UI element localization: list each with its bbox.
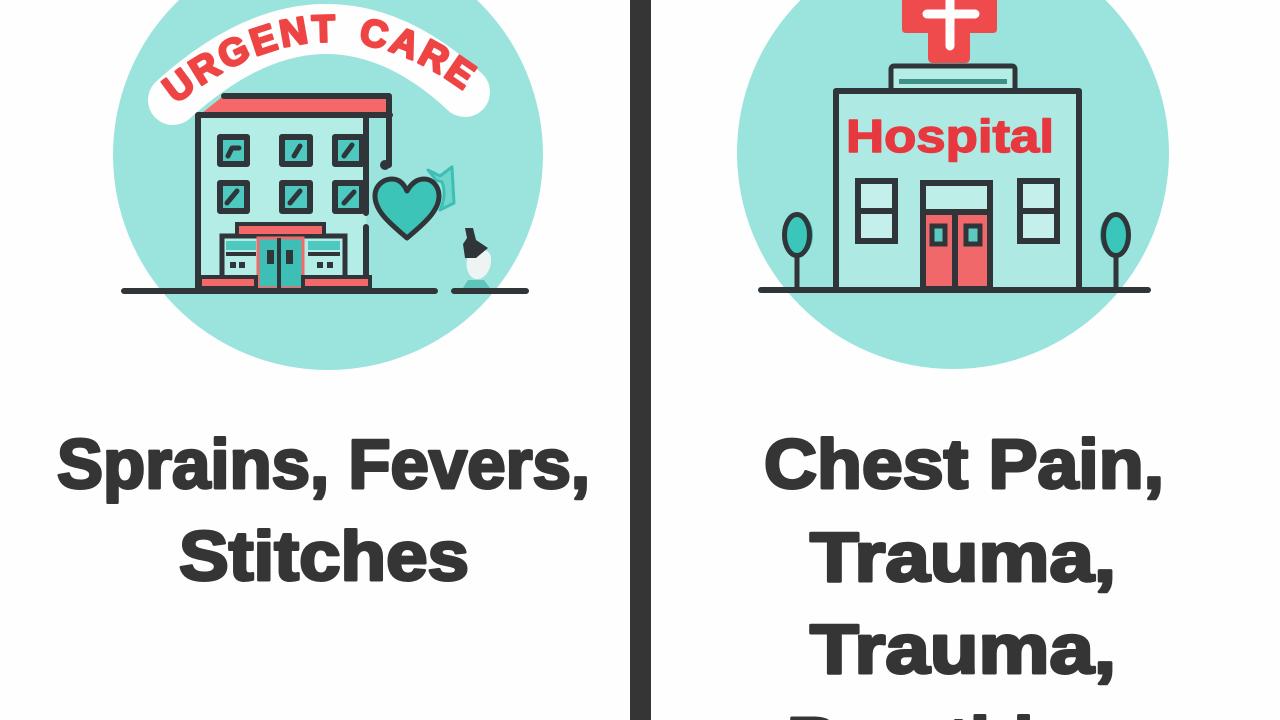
roof awning (198, 96, 390, 289)
icon: urgent care building (198, 96, 390, 289)
divider (630, 0, 651, 720)
entrance (222, 224, 345, 288)
text: hospital conditions: Trauma, (810, 518, 1116, 596)
rooftop (891, 66, 1015, 91)
icon: heart (375, 179, 439, 238)
right tree (1100, 214, 1128, 290)
text: urgent care conditions: Stitches (179, 517, 469, 595)
windows (220, 137, 362, 211)
text: hospital conditions (764, 425, 1164, 720)
base stripes (200, 277, 370, 288)
icon: gift (428, 167, 454, 210)
door (923, 183, 990, 289)
left window (858, 181, 895, 241)
text: hospital conditions: Chest Pain, (764, 425, 1164, 503)
label: urgent care: URGENT CARE (160, 14, 478, 101)
text: urgent care conditions (57, 425, 590, 595)
facade (836, 91, 1079, 290)
banner (148, 4, 490, 125)
icon: urgent care circle (113, 0, 543, 370)
ground line (761, 287, 1148, 293)
building facade (198, 113, 366, 289)
panel: urgent care (57, 0, 590, 595)
text: urgent care conditions: Sprains, Fevers, (57, 425, 590, 503)
label: hospital: Hospital (846, 110, 1054, 162)
ground line (124, 288, 526, 294)
medical cross (902, 0, 997, 63)
icon: hospital circle (737, 0, 1169, 369)
icon: hospital building (761, 0, 1148, 290)
panel: hospital (737, 0, 1169, 720)
icon: microscope (463, 228, 491, 288)
left tree (784, 214, 813, 290)
text: hospital conditions: Trauma, (810, 610, 1116, 688)
right window (1020, 181, 1057, 241)
